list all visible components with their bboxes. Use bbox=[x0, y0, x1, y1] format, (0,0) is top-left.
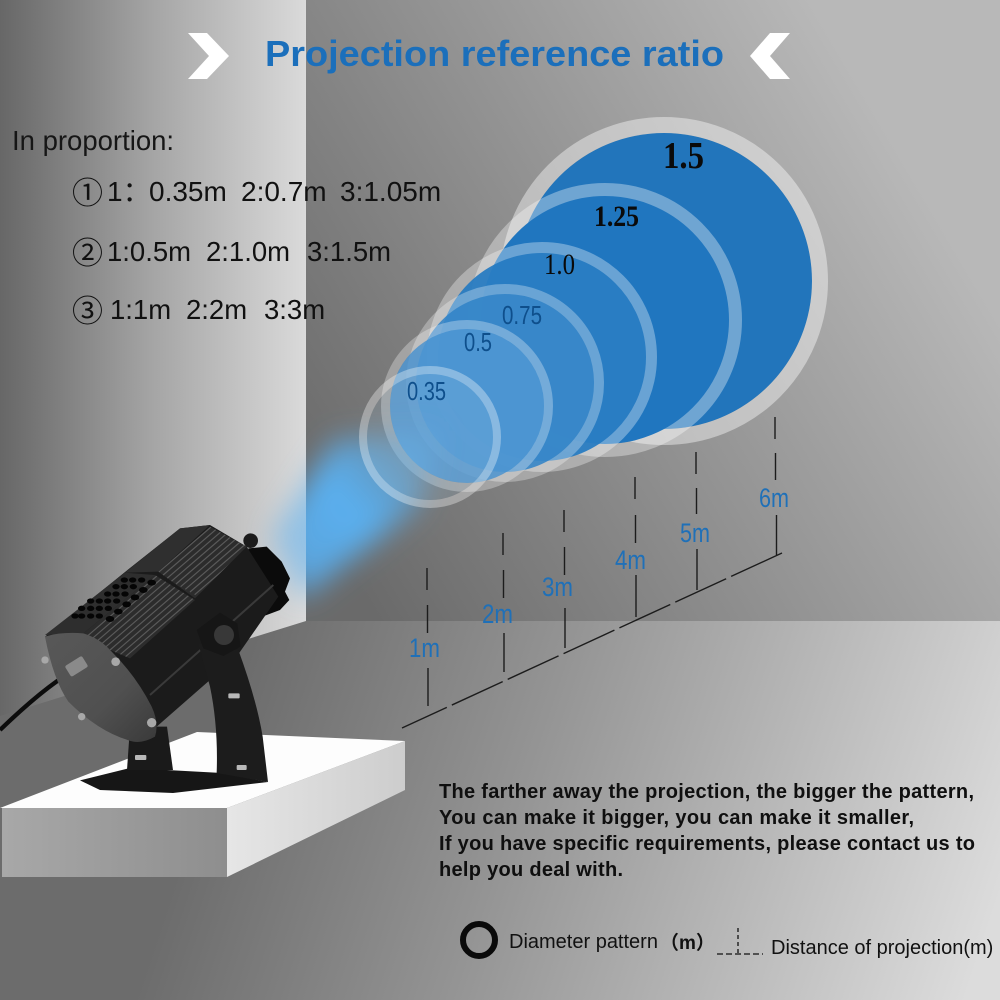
circle 0.35 bbox=[363, 370, 497, 504]
title block bbox=[188, 33, 790, 79]
label 1.5: 1.5 bbox=[663, 135, 704, 177]
projection circles large bbox=[386, 125, 820, 488]
legend diameter text: Diameter pattern bbox=[509, 931, 658, 953]
proportion row 1: ① bbox=[72, 176, 103, 211]
ribs rear bbox=[87, 573, 197, 658]
proportion row 2: 1:0.5m bbox=[107, 236, 191, 267]
distance scale bbox=[402, 417, 789, 728]
lens barrel bbox=[248, 547, 290, 620]
cable bbox=[0, 672, 72, 730]
label 0.5: 0.5 bbox=[464, 327, 492, 357]
ribbed section front bbox=[158, 527, 247, 598]
label 1.25: 1.25 bbox=[594, 200, 639, 233]
vent holes bbox=[71, 577, 156, 622]
proportion heading: In proportion: bbox=[12, 125, 174, 156]
distance labels: 1m bbox=[409, 633, 440, 663]
beam on left wall bbox=[262, 455, 306, 606]
label 0.35: 0.35 bbox=[407, 376, 446, 406]
right wall bbox=[306, 0, 1000, 622]
left chevron bbox=[188, 33, 229, 79]
distance labels: 4m bbox=[615, 545, 646, 575]
diameter labels bbox=[407, 135, 704, 406]
projection beam bbox=[272, 430, 440, 600]
legend distance text: Distance of projection(m) bbox=[771, 937, 993, 959]
platform side bbox=[227, 741, 405, 877]
left wall bbox=[0, 0, 306, 740]
proportion row 2: 3:1.5m bbox=[307, 236, 391, 267]
proportion row 1: 0.35m bbox=[149, 176, 227, 207]
body groove bbox=[150, 585, 273, 695]
legend dashed icon bbox=[717, 928, 763, 954]
proportion row 3: ③ bbox=[72, 294, 103, 329]
proportion row 2: 2:1.0m bbox=[206, 236, 290, 267]
proportion row 3: 3:3m bbox=[264, 294, 325, 325]
dashed base line bbox=[402, 553, 782, 728]
right chevron bbox=[750, 33, 790, 79]
projector bbox=[0, 525, 290, 793]
proportion row 3: 1:1m bbox=[110, 294, 171, 325]
distance labels: 5m bbox=[680, 518, 710, 548]
perforated panel bbox=[45, 573, 155, 635]
rear bracket leg bbox=[127, 727, 173, 770]
proportion row 1: 3:1.05m bbox=[340, 176, 441, 207]
bracket slots bbox=[135, 693, 247, 770]
platform front bbox=[2, 808, 227, 877]
circle 1.25 bbox=[474, 190, 736, 450]
distance labels: 3m bbox=[542, 572, 573, 602]
legend ring icon bbox=[463, 924, 495, 956]
beam on right wall bbox=[306, 421, 439, 610]
label 0.75: 0.75 bbox=[502, 300, 542, 330]
explanation text: You can make it bigger, you can make it smaller, bbox=[439, 807, 914, 829]
proportion text block bbox=[12, 125, 441, 329]
adjusting knob bbox=[197, 613, 241, 656]
explanation text: If you have specific requirements, please contact us to bbox=[439, 833, 975, 855]
circle 0.75 bbox=[411, 289, 599, 477]
distance labels: 2m bbox=[482, 599, 513, 629]
circle 1.0 bbox=[432, 248, 652, 466]
ribs front bbox=[158, 527, 244, 595]
body bbox=[45, 525, 278, 727]
proportion row 2: ② bbox=[72, 236, 103, 271]
proportion row 1: 2:0.7m bbox=[241, 176, 327, 207]
ribbed section rear bbox=[83, 575, 195, 658]
knob centre bbox=[214, 625, 234, 645]
circle 1.5 bbox=[508, 125, 820, 437]
cable gland bbox=[65, 656, 88, 677]
dashed vertical markers bbox=[427, 417, 776, 706]
legend bbox=[463, 924, 993, 959]
plate screws bbox=[41, 656, 156, 727]
bracket arm bbox=[198, 643, 268, 782]
distance labels bbox=[409, 483, 789, 663]
distance labels: 6m bbox=[759, 483, 789, 513]
circle 0.5 bbox=[386, 324, 548, 488]
floor bbox=[0, 621, 1000, 1000]
explanation text bbox=[439, 781, 975, 881]
explanation text: The farther away the projection, the bigger the pattern, bbox=[439, 781, 974, 803]
proportion row 1: 1： bbox=[107, 176, 151, 207]
rear plate bbox=[45, 633, 157, 742]
explanation text: help you deal with. bbox=[439, 859, 623, 881]
label 1.0: 1.0 bbox=[544, 248, 575, 281]
proportion row 3: 2:2m bbox=[186, 294, 247, 325]
white platform bbox=[0, 732, 405, 877]
base foot bbox=[80, 768, 268, 793]
top panel bbox=[125, 525, 210, 573]
top knob bbox=[243, 533, 258, 548]
platform top bbox=[0, 732, 405, 808]
title: Projection reference ratio bbox=[265, 33, 724, 74]
legend unit: （m） bbox=[660, 932, 715, 954]
